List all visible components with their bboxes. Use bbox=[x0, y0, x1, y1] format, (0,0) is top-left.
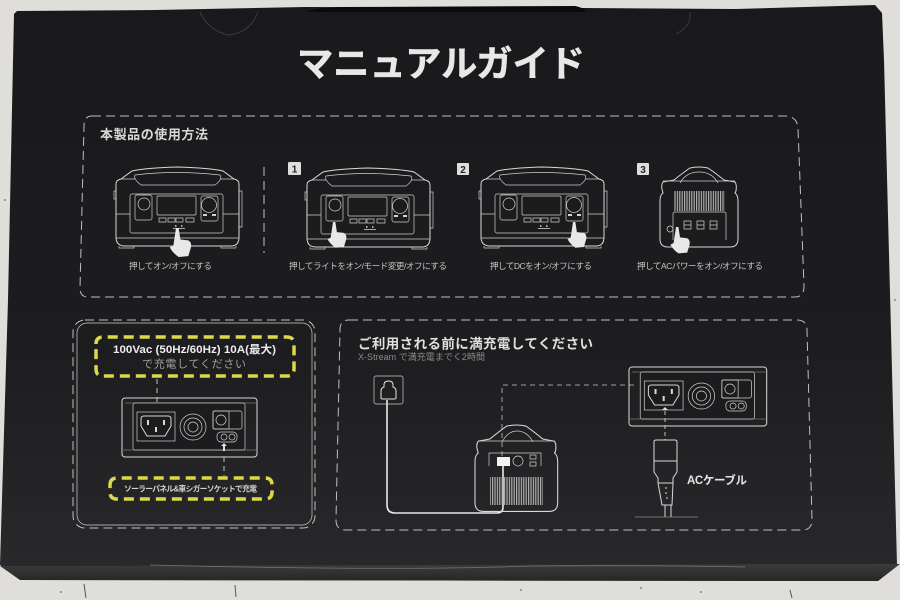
step 2: DC: 押してDCをオン/オフにする bbox=[490, 260, 592, 271]
title: マニュアルガイド bbox=[297, 43, 585, 84]
callout: AC input: 100Vac (50Hz/60Hz) 10A(最大) bbox=[113, 342, 276, 356]
callout: AC input bbox=[96, 337, 294, 376]
callout: solar and car bbox=[110, 478, 272, 499]
power cable bbox=[387, 400, 503, 513]
callout: solar and car: ソーラーパネル&車シガーソケットで充電 bbox=[124, 484, 257, 494]
panel: input ports bbox=[73, 320, 315, 528]
device port panel bbox=[122, 398, 257, 457]
AC cable bbox=[635, 440, 698, 517]
heading: how to use: 本製品の使用方法 bbox=[100, 127, 208, 142]
heading: charge fully: ご利用される前に満充電してください bbox=[358, 336, 593, 352]
step 3: AC: 押してACパワーをオン/オフにする bbox=[637, 260, 763, 271]
arrow: cable into socket bbox=[662, 407, 668, 440]
panel: charge before use bbox=[336, 320, 812, 530]
step 3: AC bbox=[637, 163, 763, 271]
subheading: charge time: X-Stream で満充電までく2時間 bbox=[358, 352, 485, 362]
step 2: DC bbox=[457, 163, 607, 271]
device port panel enlarged bbox=[629, 367, 767, 426]
divider bbox=[263, 167, 265, 253]
icon: wall outlet and plug bbox=[374, 376, 403, 404]
step 3: AC: 3 bbox=[640, 165, 646, 176]
step 1: light: 押してライトをオン/モード変更/オフにする bbox=[289, 260, 447, 271]
power station rear bbox=[475, 425, 558, 511]
step 0: power: 押してオン/オフにする bbox=[129, 260, 212, 271]
step 1: light: 1 bbox=[292, 164, 298, 176]
step 1: light bbox=[288, 162, 447, 271]
arrow: to AC socket bbox=[154, 379, 160, 411]
panel: how to use bbox=[80, 116, 804, 297]
step 2: DC: 2 bbox=[460, 165, 466, 176]
label: AC cable: ACケーブル bbox=[687, 473, 748, 487]
arrow: to DC ports bbox=[221, 443, 227, 476]
callout: AC input: で充電してください bbox=[142, 358, 246, 370]
step 0: power bbox=[114, 167, 242, 271]
dashed connector bbox=[502, 385, 637, 456]
